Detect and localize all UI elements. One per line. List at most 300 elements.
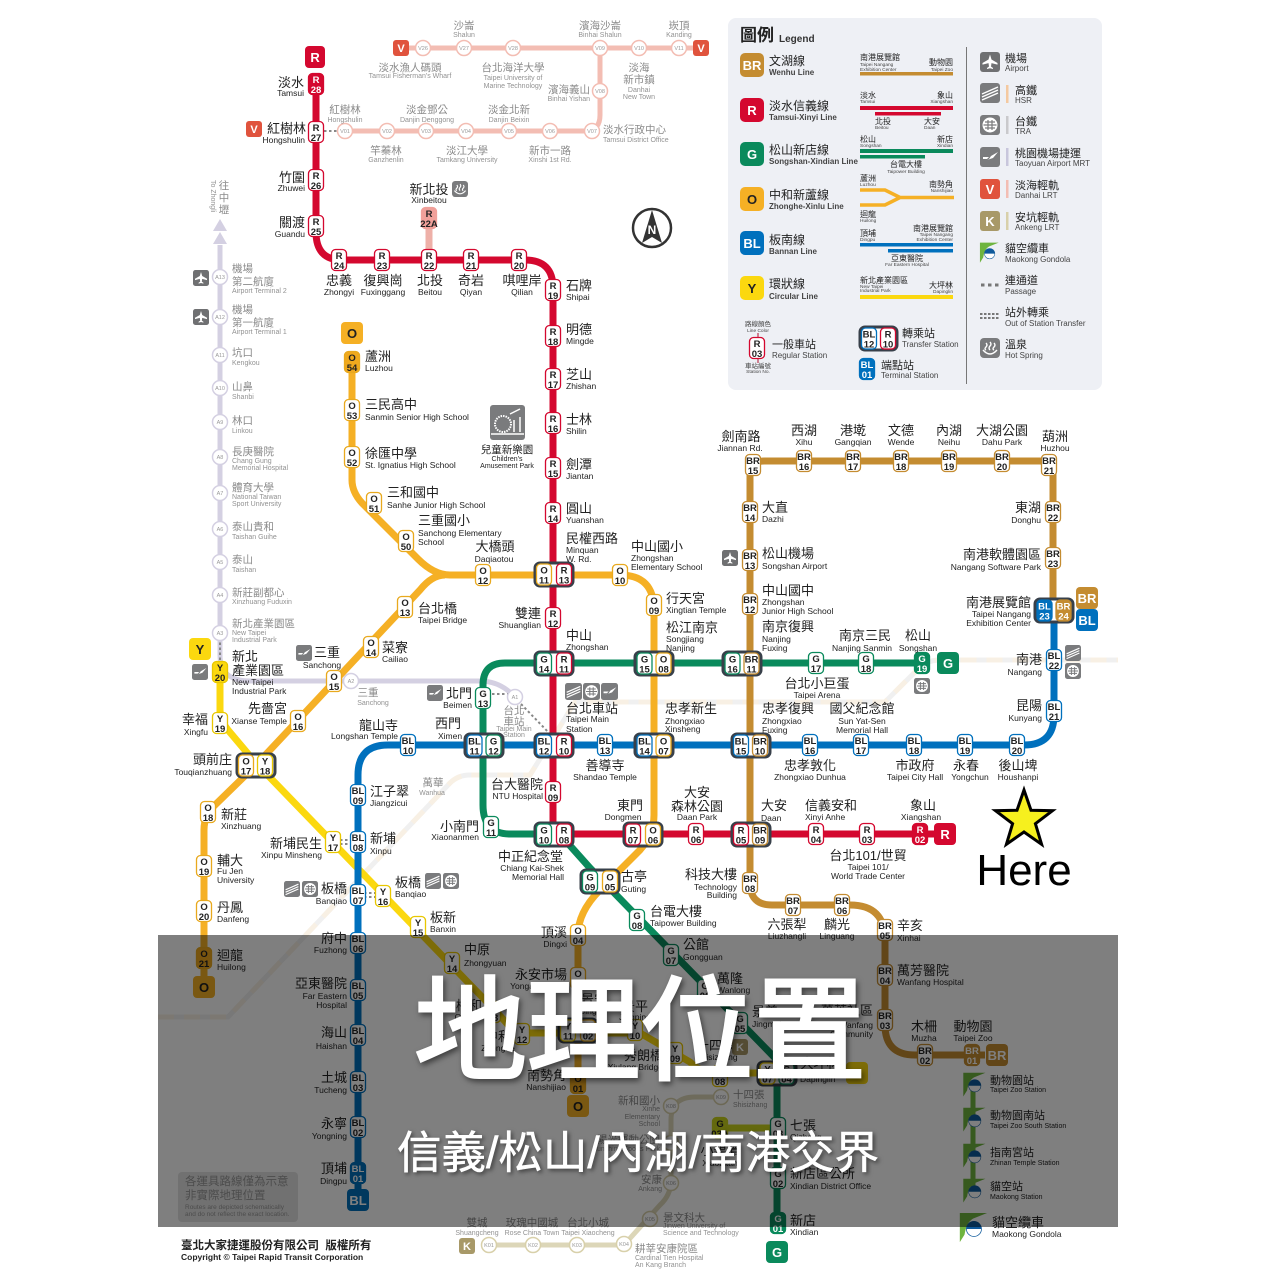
- station O13: 台北橋: [418, 601, 457, 616]
- station BL02: 永寧: [321, 1116, 347, 1131]
- station BR01: Taipei Zoo: [953, 1033, 993, 1043]
- station V08: [548, 83, 608, 103]
- station R19: [546, 278, 592, 302]
- station O15: [303, 645, 342, 693]
- station K01: Shuangcheng: [455, 1230, 499, 1237]
- station K05: K05: [645, 1217, 655, 1223]
- station BR13: Songshan Airport: [762, 561, 828, 571]
- station BL02: [312, 1116, 366, 1141]
- transfer BL11 G12: 西門: [435, 716, 461, 731]
- station G13: 北門: [446, 686, 472, 701]
- legend diagram: Circular: New Taipei: [860, 284, 883, 290]
- transfer R05 BR09: 05: [736, 836, 747, 846]
- station BR08: 08: [745, 884, 755, 895]
- station O13: 13: [400, 608, 410, 619]
- station BR17: Gangqian: [835, 437, 872, 447]
- legend: Maokong Gondola: Maokong Gondola: [1005, 255, 1071, 264]
- terminal box G east: [937, 652, 959, 674]
- station O04: O: [574, 926, 582, 937]
- station A6: 泰山貴和: [232, 520, 274, 533]
- station R25: 25: [311, 227, 322, 238]
- station BR21: 葫洲: [1042, 429, 1068, 444]
- legend: Zhonghe-Xinlu Line: O: [747, 192, 757, 207]
- station O14: O: [367, 638, 375, 649]
- station V10: New Town: [623, 94, 655, 101]
- station R15: R: [550, 459, 557, 470]
- transfer BL15 BR10: BR: [753, 736, 767, 748]
- station BL16: BL: [804, 736, 817, 747]
- transfer BL12 R10: BL: [538, 736, 551, 748]
- station BR03: BR: [878, 1011, 892, 1022]
- transfer O11 R13: [535, 531, 618, 586]
- station BL13: BL: [599, 736, 612, 747]
- station G13: 13: [478, 699, 488, 710]
- legend diagram: Bannan: Exhibition Center: [916, 237, 953, 243]
- transfer G09 O05: 09: [585, 882, 595, 894]
- station Y13: Qiaohe: [455, 1012, 482, 1022]
- transfer BL23 BR24: Taipei Nangang: [972, 609, 1031, 619]
- station R26: [278, 170, 324, 193]
- station G07: 07: [666, 956, 676, 967]
- terminal box BR north: [1076, 587, 1098, 609]
- station BR05: BR: [878, 921, 892, 932]
- legend: Ankeng LRT: [980, 210, 1059, 232]
- station V02: 竿蓁林: [370, 144, 402, 157]
- transfer G15 O08: Nanjing: [666, 643, 695, 653]
- station O51: O: [370, 494, 378, 505]
- station R14: [546, 501, 604, 525]
- station O18: [200, 802, 261, 831]
- transfer G10 R08: G: [540, 826, 548, 836]
- station O14: [364, 636, 408, 664]
- station O19: 輔大: [217, 853, 243, 868]
- station K08: Xinhe: [642, 1106, 660, 1113]
- station V04: V04: [461, 129, 471, 135]
- station Y12: Y: [519, 1025, 526, 1036]
- transfer G14 R11: 11: [559, 664, 570, 676]
- station BL01: Dingpu: [320, 1176, 347, 1186]
- station G11: G: [487, 818, 495, 829]
- transfer G09 O05: G: [586, 872, 594, 884]
- station V06: [528, 124, 572, 164]
- station BL08: Xinpu: [370, 846, 392, 856]
- transfer G15 O08: [635, 620, 718, 676]
- station A1: A1: [512, 695, 518, 701]
- station O14: 菜寮: [382, 640, 408, 655]
- station K08: [618, 1094, 678, 1128]
- transfer BL14 O07: [635, 701, 717, 758]
- station V05: [488, 103, 530, 138]
- legend: TRA: 台鐵: [1015, 114, 1037, 128]
- station G01: [770, 1212, 819, 1237]
- station G17: G: [812, 654, 820, 665]
- station G06: 06: [700, 991, 710, 1002]
- track: Zhonghe-Xinlu line: [204, 362, 654, 1090]
- station BL19: Yongchun: [951, 772, 989, 782]
- station A10: [212, 380, 254, 401]
- transfer R05 BR09: R: [738, 826, 745, 836]
- legend diagram: Bannan: 亞東醫院: [891, 253, 923, 263]
- icon: Children's Amusement Park: [490, 405, 525, 440]
- station R09: [491, 777, 560, 804]
- station V10: 新市鎮: [623, 73, 655, 86]
- station K01: K01: [484, 1243, 494, 1249]
- legend diagram: Songshan-Xindian: [860, 134, 953, 175]
- station G11: [431, 816, 498, 842]
- Bannan line stations: [284, 595, 1098, 1211]
- transfer R05 BR09: 09: [755, 836, 765, 846]
- station BR13: 13: [745, 561, 755, 572]
- station BL17: Sun Yat-Sen: [838, 716, 886, 726]
- station BL09: 江子翠: [370, 784, 409, 799]
- station O16: 先嗇宮: [248, 701, 287, 716]
- station BR13: BR: [743, 551, 757, 562]
- station BR08: 科技大樓: [685, 867, 737, 882]
- station R27: R: [313, 123, 320, 134]
- schematic disclaimer note: [178, 1172, 298, 1222]
- station BR20: 20: [997, 462, 1007, 473]
- station A9: [212, 414, 253, 435]
- icon: airport MRT Sanchong: [296, 645, 312, 661]
- station A6: [212, 520, 277, 541]
- transfer Y07 G04: G: [783, 1064, 790, 1076]
- station Y15: Y: [415, 918, 422, 929]
- station R16: [546, 412, 592, 436]
- station Y08: 08: [715, 1077, 725, 1088]
- station BL05: Far Eastern: [303, 991, 347, 1001]
- station O51: 51: [369, 504, 380, 515]
- station R24: [324, 250, 354, 297]
- terminal box BL west: BL: [349, 1193, 367, 1208]
- station BL10: Longshan Temple: [331, 731, 398, 741]
- terminal box O south: O: [573, 1099, 583, 1114]
- station BR16: Xihu: [795, 437, 813, 447]
- station BL09: BL: [352, 786, 365, 797]
- station V09: [578, 19, 622, 56]
- station A5: A5: [217, 560, 223, 566]
- station O15: 三重: [314, 645, 340, 660]
- transfer Y11 O02: 02: [583, 1032, 593, 1042]
- station O51: [366, 485, 485, 515]
- legend: Tamsui-Xinyi Line: 淡水信義線: [769, 98, 829, 113]
- legend diagram: Circular: Industrial Park: [860, 288, 891, 294]
- station BL03: [314, 1070, 366, 1095]
- station O18: O: [204, 803, 212, 814]
- legend diagram: Zhonghe-Xinlu: [860, 173, 954, 224]
- station BR21: [1040, 429, 1070, 477]
- station A3: 新北產業園區: [232, 617, 295, 630]
- track: Xiaobitan branch: [720, 1124, 778, 1132]
- station O19: [196, 853, 255, 885]
- terminal box O north: [341, 322, 363, 344]
- legend: Bannan Line: Bannan Line: [769, 247, 818, 256]
- legend: passage: [981, 273, 1038, 296]
- station R09: R: [550, 783, 557, 794]
- transfer BL11 G12: 12: [488, 746, 499, 758]
- station Zhinan Temple: Zhinan Temple Station: [990, 1160, 1060, 1167]
- station Y19: Y: [217, 714, 224, 725]
- station K05: [642, 1211, 739, 1237]
- station V26: V26: [418, 46, 428, 52]
- station BR22: [1011, 500, 1060, 525]
- station R19: Shipai: [566, 292, 590, 302]
- station R17: 芝山: [566, 367, 592, 382]
- legend diagram: Bannan: Far Eastern Hospital: [885, 262, 929, 268]
- transfer BL23 BR24: 南港展覽館: [966, 595, 1031, 610]
- label: Children's Amusement Park: [480, 443, 534, 470]
- legend: regular station: R: [754, 339, 761, 350]
- station A1: Station: [503, 732, 525, 739]
- station V09: 濱海沙崙: [579, 19, 621, 32]
- station O13: O: [401, 598, 409, 609]
- station O04: 頂溪: [541, 925, 567, 940]
- station O01: 南勢角: [527, 1068, 566, 1083]
- legend: Songshan-Xindian Line: 松山新店線: [769, 142, 829, 157]
- station Y13: 橋和: [456, 998, 482, 1013]
- station G08: G: [633, 911, 641, 922]
- station O16: Xianse Temple: [231, 716, 287, 726]
- track: Xinbeitou branch: [426, 220, 432, 260]
- station BR08: Building: [707, 890, 737, 900]
- station BR23: BR: [1046, 549, 1060, 560]
- station BR08: [685, 867, 758, 900]
- direction arrows to Zhongli: 壢: [219, 204, 230, 216]
- station Y17: 17: [328, 843, 338, 854]
- transfer BL23 BR24: 24: [1058, 612, 1069, 622]
- icons: Taipei Main: [565, 683, 618, 700]
- transfer R05 BR09: [732, 798, 787, 846]
- station R28: [277, 74, 324, 98]
- station V28: Marine Technology: [484, 83, 543, 90]
- station R15: 劍潭: [566, 457, 592, 472]
- station BL10: 10: [403, 746, 413, 757]
- legend: Danhai LRT: 淡海輕軌: [1015, 178, 1059, 192]
- station Y09: 秀朗橋: [624, 1048, 663, 1063]
- box V west: V: [397, 43, 405, 55]
- legend: transfer station: R: [885, 330, 892, 340]
- station V07: Tamsui District Office: [603, 137, 669, 144]
- station BR18: 18: [896, 462, 906, 473]
- label: Children's Amusement Park: Children's: [492, 456, 523, 463]
- station R21: 21: [466, 261, 477, 272]
- transfer O17 Y18: Y: [262, 756, 269, 768]
- station BR18: [888, 423, 915, 473]
- station G11: Xiaonanmen: [431, 832, 479, 842]
- transfer BL14 O07: BL: [638, 736, 651, 748]
- station Y10: 景平: [622, 999, 648, 1014]
- legend diagram: Bannan: 頂埔: [860, 228, 876, 238]
- schematic disclaimer note: 各運具路線僅為示意: [185, 1174, 288, 1188]
- station R14: R: [550, 504, 557, 515]
- station O52: St. Ignatius High School: [365, 460, 456, 470]
- station O13: [398, 596, 467, 625]
- terminal box BL east: [1076, 609, 1098, 631]
- station A3: New Taipei: [232, 630, 267, 637]
- schematic disclaimer note: 非實際地理位置: [185, 1188, 266, 1202]
- station BR18: Wende: [888, 437, 915, 447]
- station A13: Airport Terminal 2: [232, 288, 287, 295]
- Songshan-Xindian line stations: [427, 619, 959, 1263]
- station G11: 11: [486, 828, 497, 839]
- icons: Banqiao east: [425, 873, 459, 889]
- legend: Bannan Line: [740, 231, 818, 256]
- station V01: [327, 103, 363, 138]
- station K01: [455, 1216, 499, 1252]
- legend: terminal station: Terminal Station: [881, 371, 938, 380]
- station R23: 23: [377, 261, 387, 272]
- station O53: 三民高中: [365, 397, 417, 412]
- transfer BL11 G12: Ximen: [438, 731, 462, 741]
- station K05: Jinwen University of: [663, 1223, 725, 1230]
- station G07: G: [667, 946, 675, 957]
- station A13: [212, 262, 287, 295]
- station O16: 16: [293, 722, 303, 733]
- station BL20: 20: [1012, 746, 1022, 757]
- station BR06: 麟光: [824, 917, 850, 932]
- terminal box Y east: Y: [853, 1066, 862, 1081]
- station BR13: 松山機場: [762, 546, 814, 561]
- legend diagram: Wenhu: Taipei Zoo: [931, 67, 953, 73]
- legend: airport: Airport: [1005, 64, 1029, 73]
- track: Songshan-Xindian line: [483, 663, 922, 1223]
- station Y15: 15: [413, 928, 424, 939]
- station R28: Tamsui: [277, 88, 304, 98]
- transfer G10 R08: 中正紀念堂: [498, 849, 563, 864]
- station R19: R: [550, 281, 557, 292]
- station R23: [361, 250, 405, 297]
- station O19: 19: [199, 867, 209, 878]
- transfer O11 R13: O: [540, 566, 548, 576]
- legend diagram: Wenhu: Exhibition Center: [860, 67, 897, 73]
- station BR21: 21: [1044, 466, 1055, 477]
- station R12: [498, 606, 560, 630]
- terminal box R east: R: [940, 827, 950, 842]
- station O20: 丹鳳: [217, 900, 243, 915]
- station BR19: 19: [944, 462, 954, 473]
- station BL19: [951, 734, 989, 782]
- station O10: O: [616, 566, 624, 577]
- transfer BL23 BR24: 23: [1039, 612, 1050, 622]
- legend diagram: Zhonghe-Xinlu: 迴龍: [860, 209, 876, 219]
- station Y20: 20: [215, 673, 225, 684]
- station K06: 安康: [641, 1173, 662, 1186]
- station G19: 19: [917, 664, 927, 675]
- station G05: Jingmei: [752, 1019, 781, 1029]
- transfer R07 O06: [605, 798, 662, 846]
- station BR12: Junior High School: [762, 606, 833, 616]
- station BR05: [878, 918, 923, 943]
- station R18: 18: [548, 337, 558, 348]
- station V28: Taipei University of: [484, 75, 542, 82]
- legend: transfer station: 12: [864, 340, 874, 350]
- transfer O11 R13: W. Rd.: [566, 554, 592, 564]
- station BR20: [976, 423, 1028, 473]
- legend: hot spring: 溫泉: [1005, 337, 1027, 351]
- station A7: 體育大學: [232, 481, 274, 494]
- transfer BL14 O07: 14: [639, 746, 650, 758]
- station R22A: [409, 182, 449, 230]
- station BL02: BL: [352, 1118, 365, 1129]
- station Y16: 16: [378, 897, 388, 908]
- transfer G16 BR11: Nanjing: [762, 634, 791, 644]
- station A4: A4: [217, 593, 223, 599]
- station R22: 北投: [417, 273, 443, 288]
- station BL16: Zhongxiao Dunhua: [774, 772, 846, 782]
- station K02: 玫瑰中國城: [506, 1216, 559, 1229]
- station V27: Shalun: [453, 32, 475, 39]
- legend diagram: Tamsui-Xinyi: Daan: [924, 125, 936, 131]
- station BL18: [887, 734, 943, 782]
- legend: Maokong Gondola: 貓空纜車: [1005, 241, 1049, 255]
- station BL08: BL: [352, 833, 365, 844]
- station BR15: 劍南路: [721, 429, 761, 444]
- station Y19: 幸福: [182, 712, 208, 727]
- station BR06: [820, 894, 855, 941]
- station O52: [344, 446, 456, 470]
- station R16: R: [550, 414, 557, 425]
- station BL20: 後山埤: [998, 758, 1038, 773]
- transfer G15 O08: O: [660, 654, 667, 666]
- station BL21: BL: [1048, 702, 1061, 713]
- station BR23: 南港軟體園區: [963, 547, 1041, 562]
- station O10: Elementary School: [631, 562, 702, 572]
- legend: Songshan-Xindian Line: Songshan-Xindian Line: [769, 157, 858, 166]
- station V26: 淡水漁人碼頭: [378, 61, 442, 74]
- station G13: Beimen: [443, 700, 472, 710]
- station G08: [630, 904, 717, 932]
- legend: Circular Line: 環狀線: [769, 276, 805, 291]
- transfer O17 Y18: 頭前庄: [193, 752, 232, 767]
- station R15: Jiantan: [566, 471, 594, 481]
- station BL17: 17: [856, 746, 866, 757]
- transfer R07 O06: O: [649, 826, 657, 836]
- transfer BL12 R10: 12: [539, 746, 549, 758]
- station R20: 20: [514, 261, 524, 272]
- station V04: 淡江大學: [446, 144, 488, 157]
- station A8: 長庚醫院: [232, 445, 274, 458]
- station BR08: Technology: [694, 882, 738, 892]
- station K09: Shisizhang: [733, 1102, 767, 1109]
- station O14: Cailiao: [382, 654, 408, 664]
- station A3: [212, 617, 295, 644]
- station O20: Danfeng: [217, 914, 249, 924]
- station R24: R: [336, 251, 343, 262]
- station BR03: 萬芳社區: [821, 1003, 873, 1018]
- station R22A: 新北投: [409, 182, 449, 197]
- station G05: 05: [735, 1024, 746, 1035]
- icon: airport MRT Beimen: [427, 685, 443, 701]
- station BL08: 08: [353, 843, 363, 854]
- station BR12: BR: [743, 595, 757, 606]
- station G03A: G: [716, 1119, 724, 1130]
- station A6: A6: [217, 527, 223, 533]
- station O20: [196, 900, 249, 924]
- station O53: Sanmin Senior High School: [365, 412, 469, 422]
- station A11: A11: [215, 353, 225, 359]
- transfer Y11 O02: Jingan: [581, 1006, 606, 1016]
- station Y14: 14: [447, 964, 458, 975]
- legend: Zhonghe-Xinlu Line: [740, 187, 844, 211]
- station BL08: 新埔: [370, 831, 396, 846]
- legend: Bannan Line: BL: [743, 236, 761, 251]
- legend: out of station transfer: 站外轉乘: [1005, 305, 1049, 319]
- station O50: 三重國小: [418, 513, 470, 528]
- station BR15: Jiannan Rd.: [717, 443, 763, 453]
- station V02: [368, 124, 404, 164]
- station A1: 台北: [504, 704, 524, 717]
- transfer R07 O06: 東門: [617, 798, 643, 813]
- station R27: 27: [311, 133, 321, 144]
